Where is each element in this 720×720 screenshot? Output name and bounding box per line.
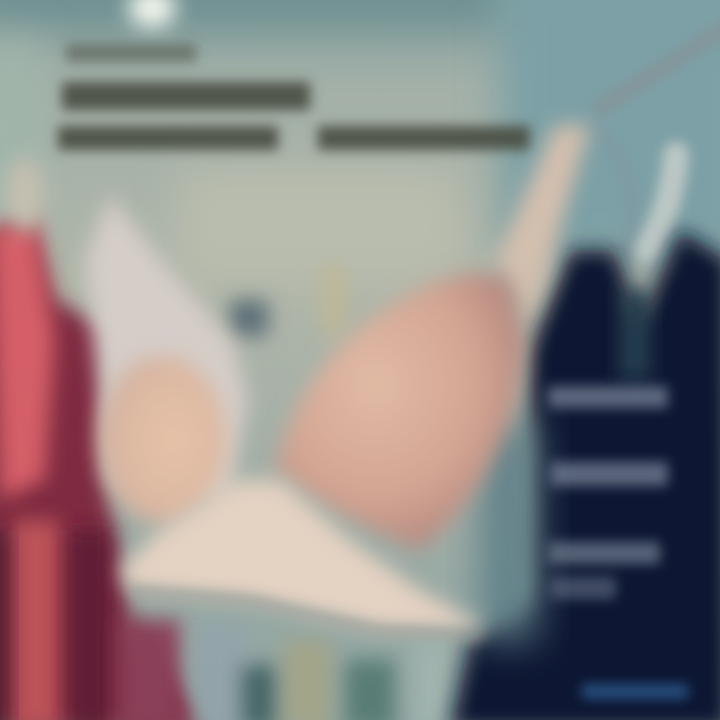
right cup (275, 273, 525, 550)
ceiling light (128, 0, 176, 28)
hanger (592, 25, 720, 250)
band (120, 480, 490, 630)
band shadow (130, 590, 480, 635)
bra (85, 125, 590, 635)
navy garment, right (450, 230, 720, 720)
title text (illegible in reference) (58, 44, 530, 150)
red garment, left (0, 157, 210, 720)
bottom link text (illegible in reference) (582, 684, 688, 699)
lower background stripes (195, 265, 452, 720)
right text block (illegible in reference) (548, 386, 668, 599)
left cup (98, 356, 226, 524)
strap (495, 125, 590, 320)
left cup mesh (85, 195, 248, 500)
